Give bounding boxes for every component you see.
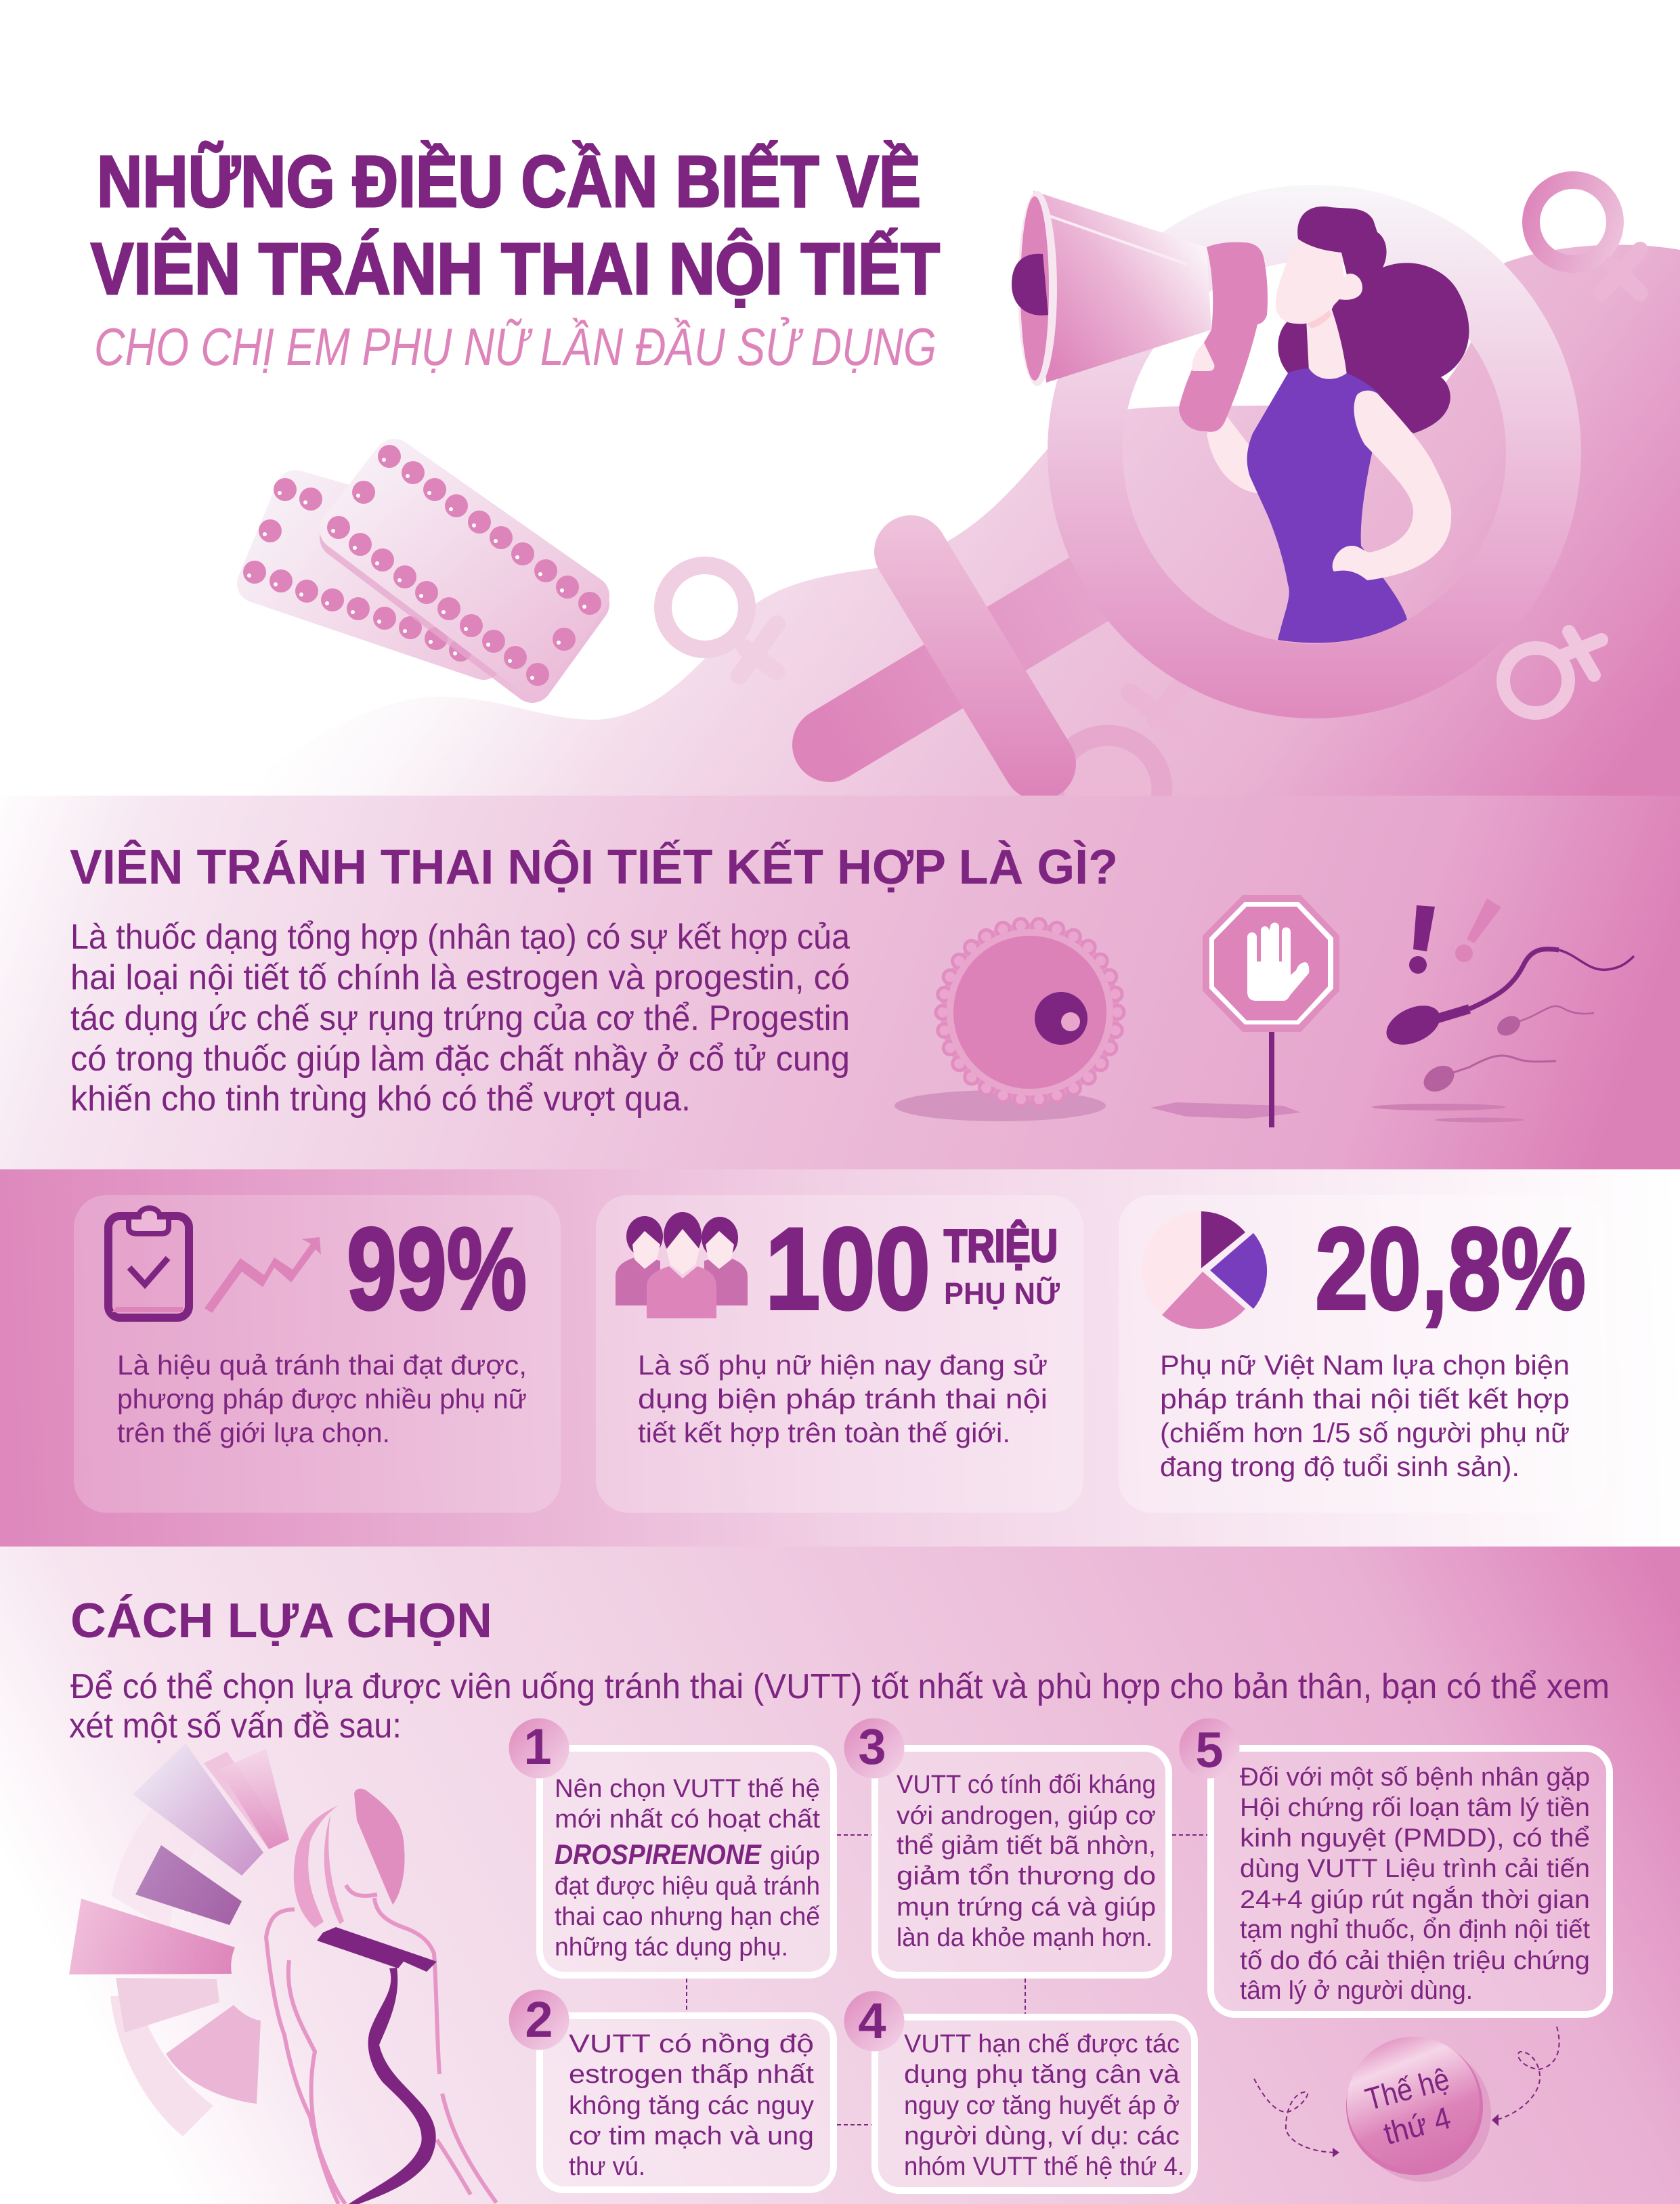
option box 1 xyxy=(509,1719,834,1975)
icon: sperm cells xyxy=(1372,949,1634,1123)
option text 1: Nên chọn VUTT thế hệ xyxy=(555,1775,820,1803)
option text 2: VUTT có nồng độ xyxy=(569,2030,814,2058)
option text 2: thư vú. xyxy=(569,2153,645,2181)
option text 1: mới nhất có hoạt chất xyxy=(555,1805,820,1834)
stat description: tiết kết hợp trên toàn thế giới. xyxy=(638,1417,1010,1448)
purple curve xyxy=(349,1968,436,2204)
megaphone xyxy=(1012,191,1211,386)
intro text xyxy=(69,1667,1610,1746)
stat description xyxy=(1160,1349,1570,1482)
woman's face xyxy=(1276,239,1362,324)
option text 5: dùng VUTT Liệu trình cải tiến xyxy=(1240,1855,1590,1883)
intro text: Để có thể chọn lựa được viên uống tránh thai (VUTT) tốt nhất và phù hợp cho bản thân, bạn có thể xem xyxy=(70,1667,1610,1706)
card: 20,8 percent xyxy=(1119,1195,1606,1513)
stat description: Là hiệu quả tránh thai đạt được, xyxy=(117,1349,527,1381)
option text 1: đạt được hiệu quả tránh xyxy=(555,1872,820,1901)
stat description: dụng biện pháp tránh thai nội xyxy=(638,1383,1048,1414)
option text 3: VUTT có tính đối kháng xyxy=(897,1771,1156,1799)
section background xyxy=(0,1547,1680,2204)
option text 2: estrogen thấp nhất xyxy=(569,2060,814,2089)
stat description: trên thế giới lựa chọn. xyxy=(117,1417,390,1448)
illustration: woman silhouette xyxy=(266,1789,496,2204)
section background xyxy=(0,796,1680,1170)
card: 99 percent xyxy=(74,1195,561,1513)
small venus symbol bottom right xyxy=(1503,632,1601,713)
option text 4 xyxy=(904,2030,1184,2181)
icon: egg cell xyxy=(895,925,1117,1121)
option text 2: cơ tim mạch và ung xyxy=(569,2122,814,2151)
pill label: Thế hệ xyxy=(1362,2061,1453,2117)
option box 4 xyxy=(844,1991,1194,2190)
woman's right arm xyxy=(1333,391,1451,580)
number badge 4 xyxy=(844,1991,905,2052)
title: VIÊN TRÁNH THAI NỘI TIẾT xyxy=(91,228,940,309)
option text 5: tố do đó cải thiện triệu chứng xyxy=(1240,1947,1590,1975)
pill: fourth generation xyxy=(1346,2037,1491,2182)
stat number: 99% xyxy=(347,1204,527,1334)
number badge 3 xyxy=(844,1719,905,1778)
pie chart xyxy=(1142,1211,1267,1329)
icon: group of women xyxy=(616,1212,748,1318)
stat unit: PHỤ NỮ xyxy=(944,1276,1060,1311)
card: 100 million women xyxy=(596,1195,1083,1513)
option text 5: kinh nguyệt (PMDD), có thể xyxy=(1240,1824,1590,1853)
option text 5 xyxy=(1240,1763,1590,2005)
woman's hand xyxy=(1192,343,1214,371)
title: NHỮNG ĐIỀU CẦN BIẾT VỀ xyxy=(97,140,921,222)
venus ring xyxy=(1048,185,1581,718)
woman's hair xyxy=(1278,207,1469,433)
option text 2 xyxy=(569,2030,814,2181)
stat description xyxy=(638,1349,1048,1448)
number badge 1: 1 xyxy=(523,1719,552,1775)
hair xyxy=(354,1789,405,1905)
option text 1 xyxy=(555,1775,820,1962)
heading: VIÊN TRÁNH THAI NỘI TIẾT KẾT HỢP LÀ GÌ? xyxy=(70,840,1118,894)
stat description: Phụ nữ Việt Nam lựa chọn biện xyxy=(1160,1349,1570,1381)
small venus symbol left xyxy=(663,565,777,676)
stat number: 20,8% xyxy=(1315,1204,1586,1334)
illustration: woman with megaphone xyxy=(1012,191,1469,643)
venus stem xyxy=(830,576,1111,745)
option text 2: không tăng các nguy xyxy=(569,2092,814,2120)
option text 1: thai cao nhưng hạn chế xyxy=(555,1903,820,1931)
option text 3: mụn trứng cá và giúp xyxy=(897,1893,1156,1922)
megaphone handle xyxy=(1179,242,1268,432)
option text 5: 24+4 giúp rút ngắn thời gian xyxy=(1240,1885,1590,1914)
description text: Là thuốc dạng tổng hợp (nhân tạo) có sự kết hợp của xyxy=(70,917,850,957)
option text 4: nguy cơ tăng huyết áp ở xyxy=(904,2092,1180,2120)
number badge 5: 5 xyxy=(1195,1722,1224,1778)
description text: tác dụng ức chế sự rụng trứng của cơ thể. Progestin xyxy=(70,999,850,1038)
option text 5: tâm lý ở người dùng. xyxy=(1240,1976,1473,2005)
description text: có trong thuốc giúp làm đặc chất nhầy ở cổ tử cung xyxy=(70,1039,850,1079)
stat description: phương pháp được nhiều phụ nữ xyxy=(117,1383,527,1414)
illustration: birth control blister packs xyxy=(243,445,601,686)
purple band xyxy=(317,1927,437,1972)
option box 3 xyxy=(844,1719,1169,1975)
arrow: dashed loop left xyxy=(1254,2079,1339,2157)
heading: CÁCH LỰA CHỌN xyxy=(70,1594,492,1648)
option text 3 xyxy=(897,1771,1156,1952)
option box 2 xyxy=(509,1989,834,2190)
woman's dress xyxy=(1247,368,1407,643)
pill label: thứ 4 xyxy=(1380,2100,1455,2151)
option text 5: Đối với một số bệnh nhân gặp xyxy=(1240,1763,1590,1792)
icon: exclamation marks xyxy=(1409,899,1501,974)
option text 1: những tác dụng phụ. xyxy=(555,1933,788,1962)
number badge 2: 2 xyxy=(525,1991,553,2048)
icon: stop sign with hand xyxy=(1150,895,1339,1127)
intro text: xét một số vấn đề sau: xyxy=(69,1706,402,1746)
hero background: pink wave xyxy=(230,244,1680,799)
neck shadow xyxy=(1307,310,1332,328)
option box 5 xyxy=(1180,1719,1610,2014)
subtitle: CHO CHỊ EM PHỤ NỮ LẦN ĐẦU SỬ DỤNG xyxy=(94,317,936,376)
woman's neck xyxy=(1306,308,1347,379)
illustration: radiating fan shapes xyxy=(69,1744,289,2136)
panel: how to choose xyxy=(0,1547,1680,2204)
option text 5: Hội chứng rối loạn tâm lý tiền xyxy=(1240,1794,1590,1822)
body outlines xyxy=(266,1885,496,2204)
small venus symbol top right xyxy=(1531,180,1640,293)
stat unit xyxy=(944,1219,1060,1311)
panel: statistics xyxy=(0,1169,1680,1547)
number badge 3: 3 xyxy=(858,1719,886,1775)
option text 1: giúp xyxy=(770,1842,820,1870)
number badge 5 xyxy=(1180,1719,1239,1778)
number badge 2 xyxy=(509,1989,569,2050)
option text 1: DROSPIRENONE xyxy=(555,1838,762,1870)
number badge 4: 4 xyxy=(858,1993,886,2049)
stat description: Là số phụ nữ hiện nay đang sử xyxy=(638,1349,1048,1381)
description text: khiến cho tinh trùng khó có thể vượt qua. xyxy=(70,1079,691,1119)
stat number: 100 xyxy=(765,1204,930,1334)
icon: clipboard xyxy=(108,1208,189,1318)
description text xyxy=(70,917,850,1119)
option text 3: thể giảm tiết bã nhờn, xyxy=(897,1832,1156,1860)
option text 3: với androgen, giúp cơ xyxy=(897,1802,1156,1830)
description text: hai loại nội tiết tố chính là estrogen và progestin, có xyxy=(70,958,850,997)
stat description: pháp tránh thai nội tiết kết hợp xyxy=(1160,1383,1570,1414)
stat description xyxy=(117,1349,527,1448)
stat description: (chiếm hơn 1/5 số người phụ nữ xyxy=(1160,1417,1570,1448)
icon: rising arrow xyxy=(204,1237,321,1313)
stat description: đang trong độ tuổi sinh sản). xyxy=(1160,1451,1520,1482)
option text 4: dụng phụ tăng cân và xyxy=(904,2060,1180,2089)
panel: what is the combined pill xyxy=(0,796,1680,1170)
option text 4: VUTT hạn chế được tác xyxy=(904,2030,1180,2058)
section background xyxy=(0,1169,1680,1547)
option text 4: nhóm VUTT thế hệ thứ 4. xyxy=(904,2153,1184,2181)
woman's back arm xyxy=(1207,416,1260,494)
connector: dashed lines xyxy=(687,1835,1207,2125)
option text 4: người dùng, ví dụ: các xyxy=(904,2122,1180,2151)
arrow: dashed loop right xyxy=(1492,2027,1559,2126)
venus crossbar xyxy=(911,552,1039,764)
option text 3: giảm tổn thương do xyxy=(897,1862,1156,1890)
option text 3: làn da khỏe mạnh hơn. xyxy=(897,1924,1153,1952)
number badge 1 xyxy=(509,1719,569,1778)
option text 5: tạm nghỉ thuốc, ổn định nội tiết xyxy=(1240,1916,1590,1944)
small venus symbol bottom centre xyxy=(1054,686,1191,844)
hero illustration: large venus symbol xyxy=(830,185,1581,844)
title xyxy=(91,140,940,376)
pill label xyxy=(1362,2061,1463,2154)
stat unit: TRIỆU xyxy=(944,1219,1058,1272)
